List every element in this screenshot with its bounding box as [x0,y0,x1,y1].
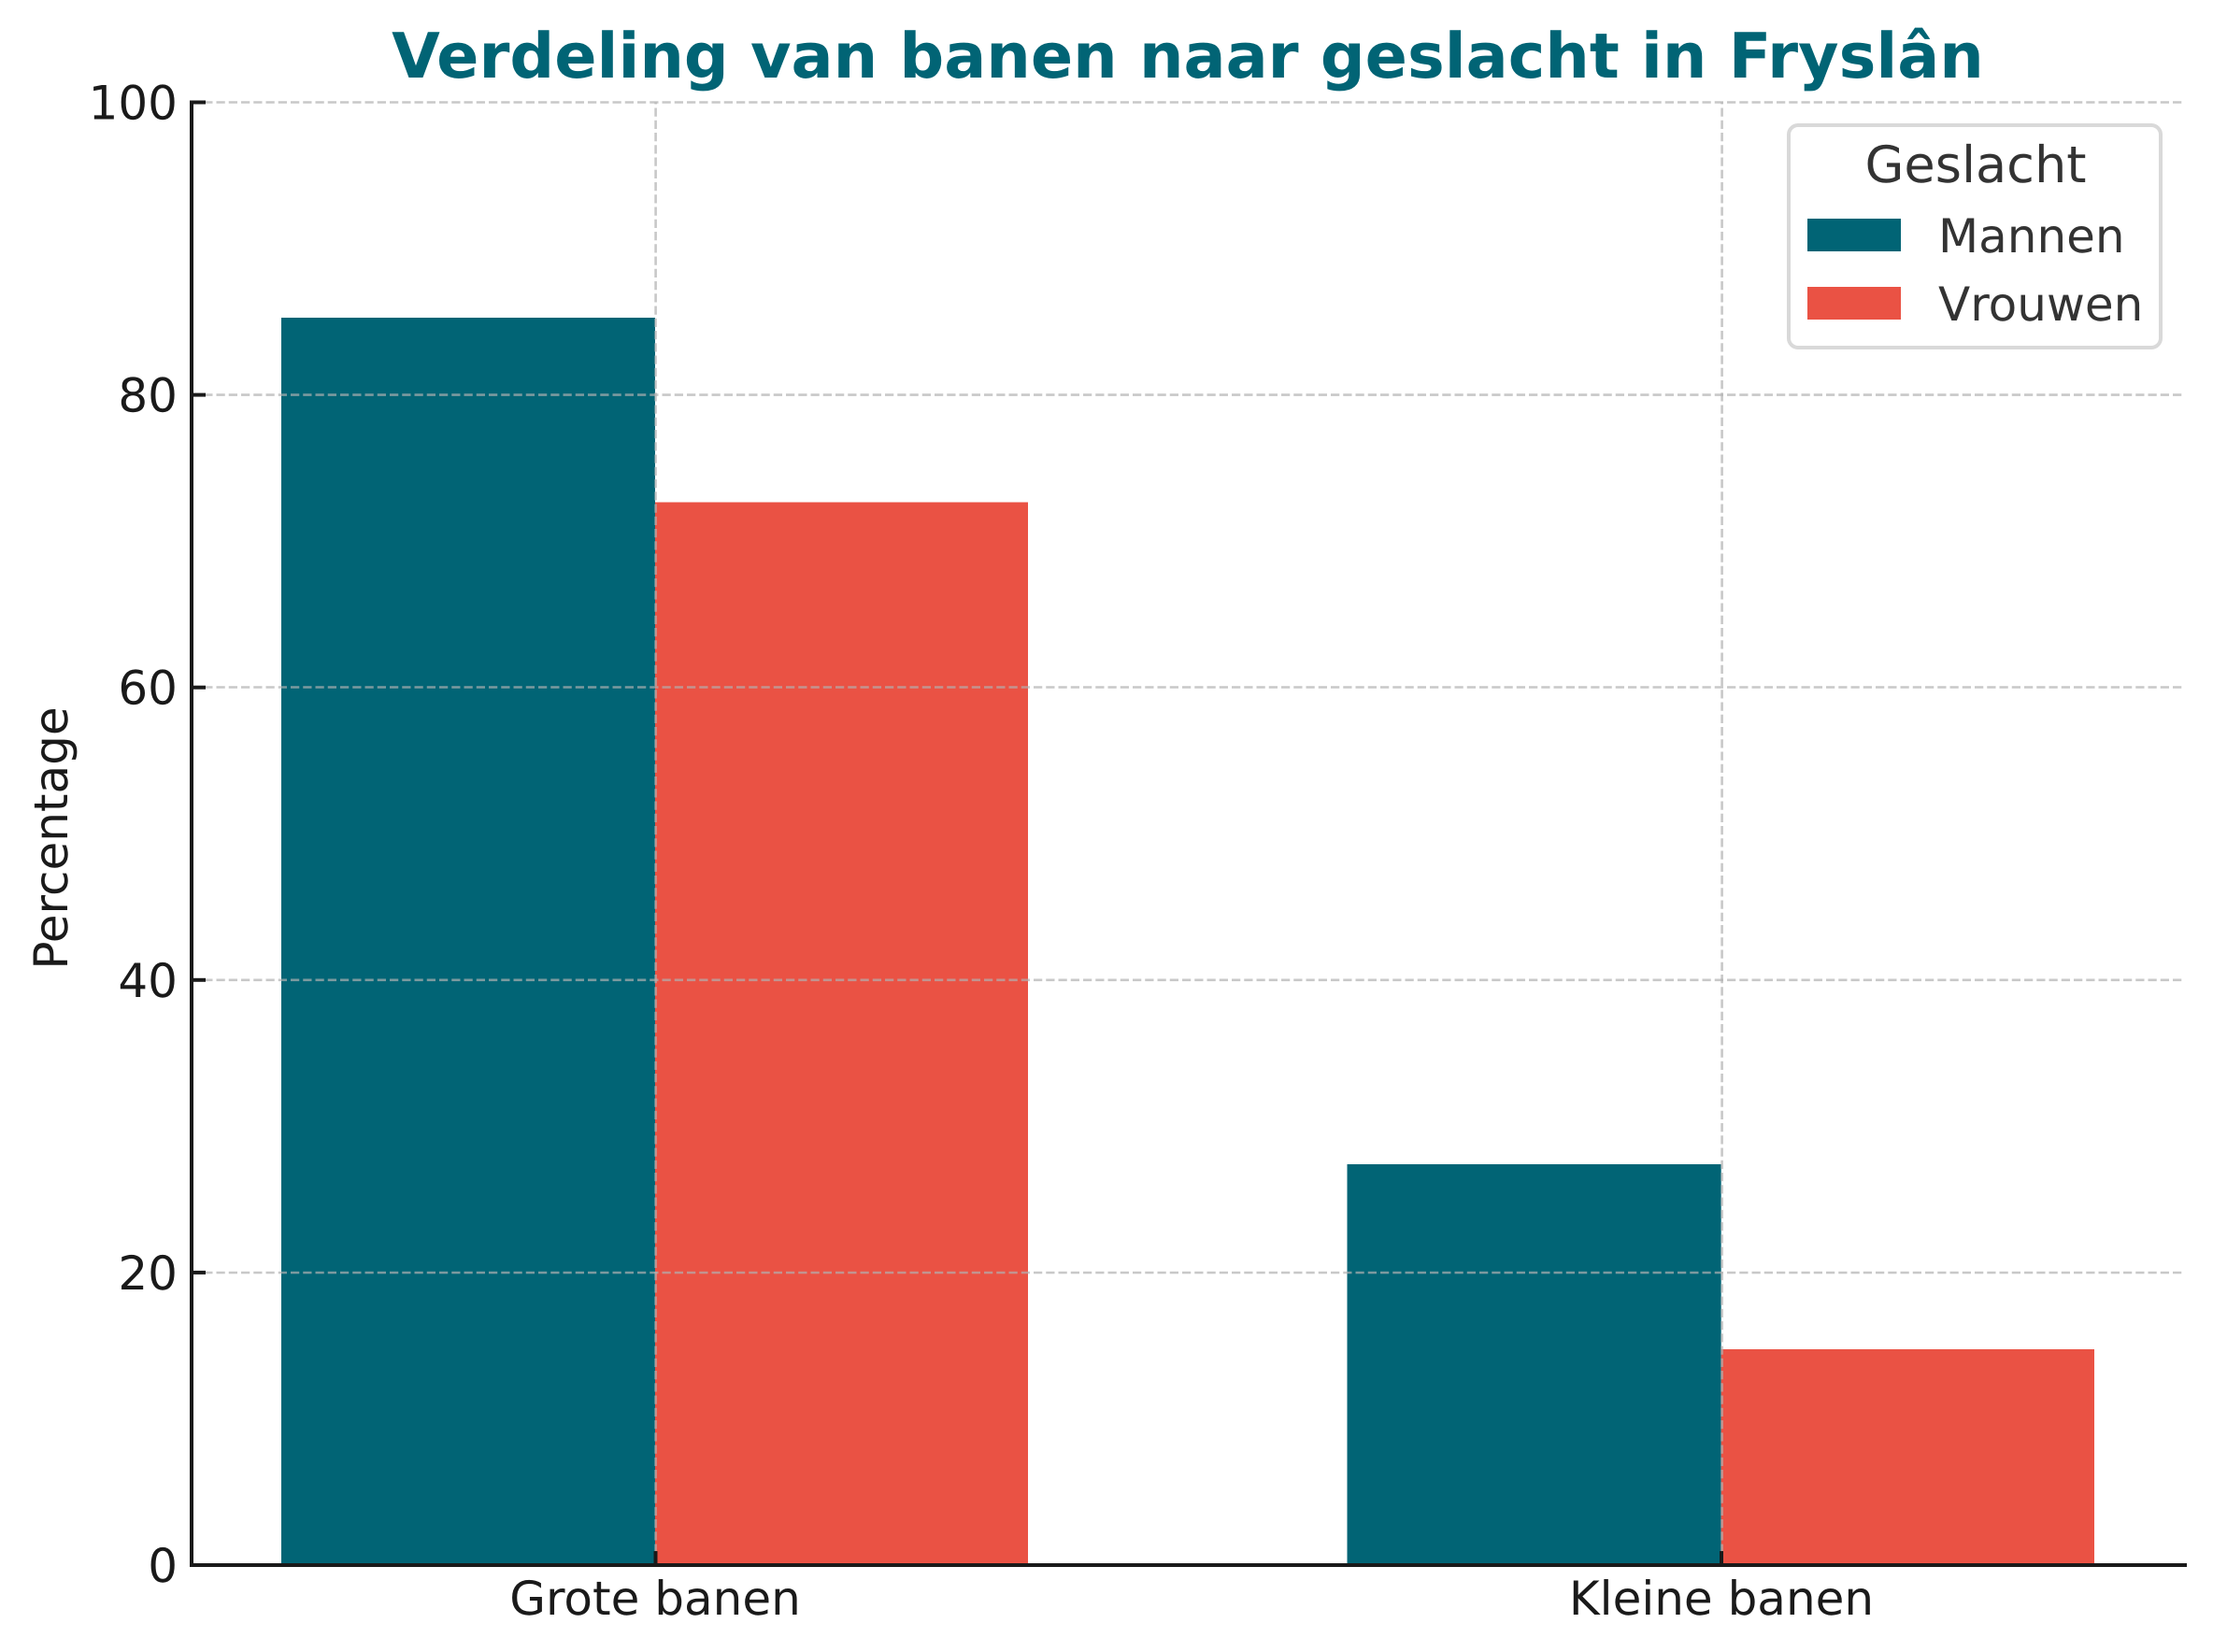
y-axis tick labels: 40 [118,954,178,1008]
y-axis tick labels [89,77,178,1593]
legend item: Vrouwen [1807,278,2143,332]
y-axis tick labels: 100 [89,77,178,131]
y-axis tick labels: 80 [118,369,178,423]
legend item: Mannen [1807,209,2125,263]
legend [1789,125,2161,348]
y-axis label: Percentage [24,706,79,970]
bar: Kleine banen, Mannen [1348,1164,1721,1565]
x-axis labels: Grote banen [509,1572,801,1626]
x-axis labels: Kleine banen [1569,1572,1874,1626]
bar: Grote banen, Vrouwen [655,503,1028,1565]
legend item: Vrouwen: Vrouwen [1938,278,2143,332]
y-axis tick labels: 60 [118,662,178,716]
y-axis tick labels: 0 [148,1539,178,1593]
bar: Kleine banen, Vrouwen [1721,1349,2094,1565]
legend title: Geslacht [1864,135,2087,194]
bars: Grote banen [281,318,1028,1565]
legend item: Mannen: Mannen [1938,209,2125,263]
bar: Grote banen, Mannen [281,318,655,1565]
title: Verdeling van banen naar geslacht in Fryslân [392,20,1984,93]
y-axis tick labels: 20 [118,1246,178,1301]
legend box [1789,125,2161,348]
bars: Kleine banen [1348,1164,2094,1565]
x-axis labels [509,1572,1874,1626]
